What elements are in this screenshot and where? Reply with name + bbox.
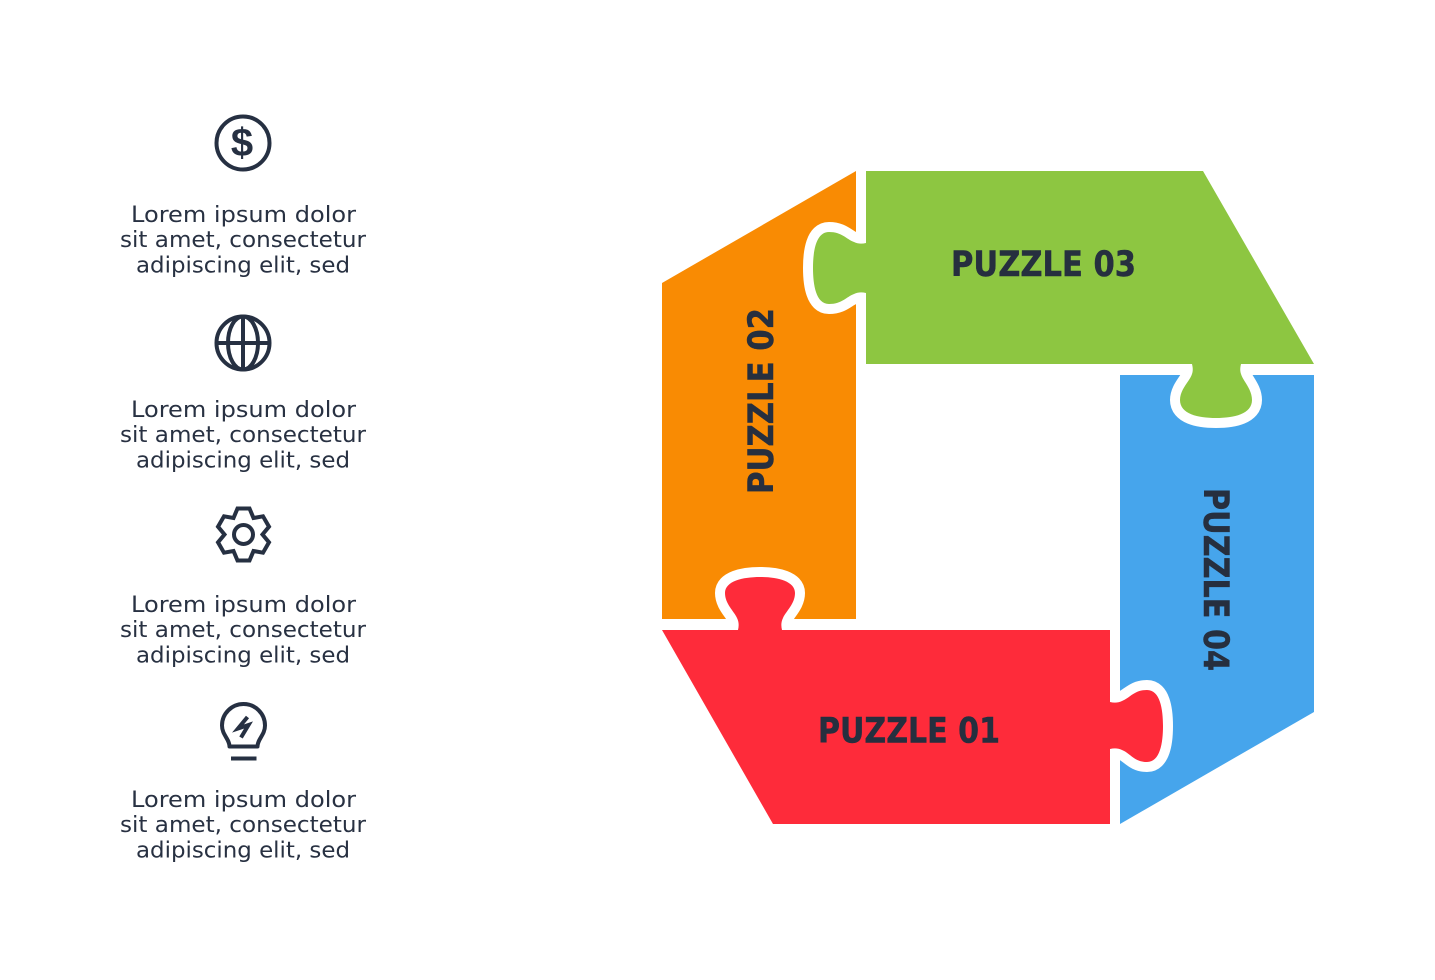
icon: gear [218,508,269,560]
text block: settings [120,592,367,668]
text block: idea: sit amet, consectetur [120,812,367,838]
text block: settings: Lorem ipsum dolor [131,592,357,618]
puzzle piece 02: orange [662,171,856,619]
icon: globe [216,316,270,370]
text block: global: sit amet, consectetur [120,422,367,448]
puzzle piece 04: blue [1120,375,1314,824]
text block: finance: Lorem ipsum dolor [131,202,357,228]
icon: dollar coin: $ [231,121,253,165]
puzzle piece 01: red: PUZZLE 01 [818,712,1000,752]
text block: global: adipiscing elit, sed [136,448,350,474]
puzzle piece 02: orange: PUZZLE 02 [742,308,782,494]
text block: settings: sit amet, consectetur [120,617,367,643]
puzzle piece 03: green: PUZZLE 03 [951,245,1136,285]
text block: finance: adipiscing elit, sed [136,252,350,278]
text block: idea [120,787,367,864]
text block: global: Lorem ipsum dolor [131,397,357,423]
list item: finance [120,116,367,278]
list item: global [120,316,367,474]
list item: settings [120,508,367,668]
puzzle piece 04: blue: PUZZLE 04 [1195,488,1235,671]
text block: global [120,397,367,474]
icon: light bulb [222,704,265,758]
text block: idea: adipiscing elit, sed [136,838,350,864]
text block: finance: sit amet, consectetur [120,227,367,253]
text block: finance [120,202,367,278]
puzzle ring diagram [662,171,1314,824]
puzzle piece 03: green [813,171,1314,418]
icon: dollar coin [216,116,270,170]
text block: settings: adipiscing elit, sed [136,642,350,668]
text block: idea: Lorem ipsum dolor [131,787,357,813]
puzzle piece 01: red [662,577,1163,824]
list item: idea [120,704,367,864]
